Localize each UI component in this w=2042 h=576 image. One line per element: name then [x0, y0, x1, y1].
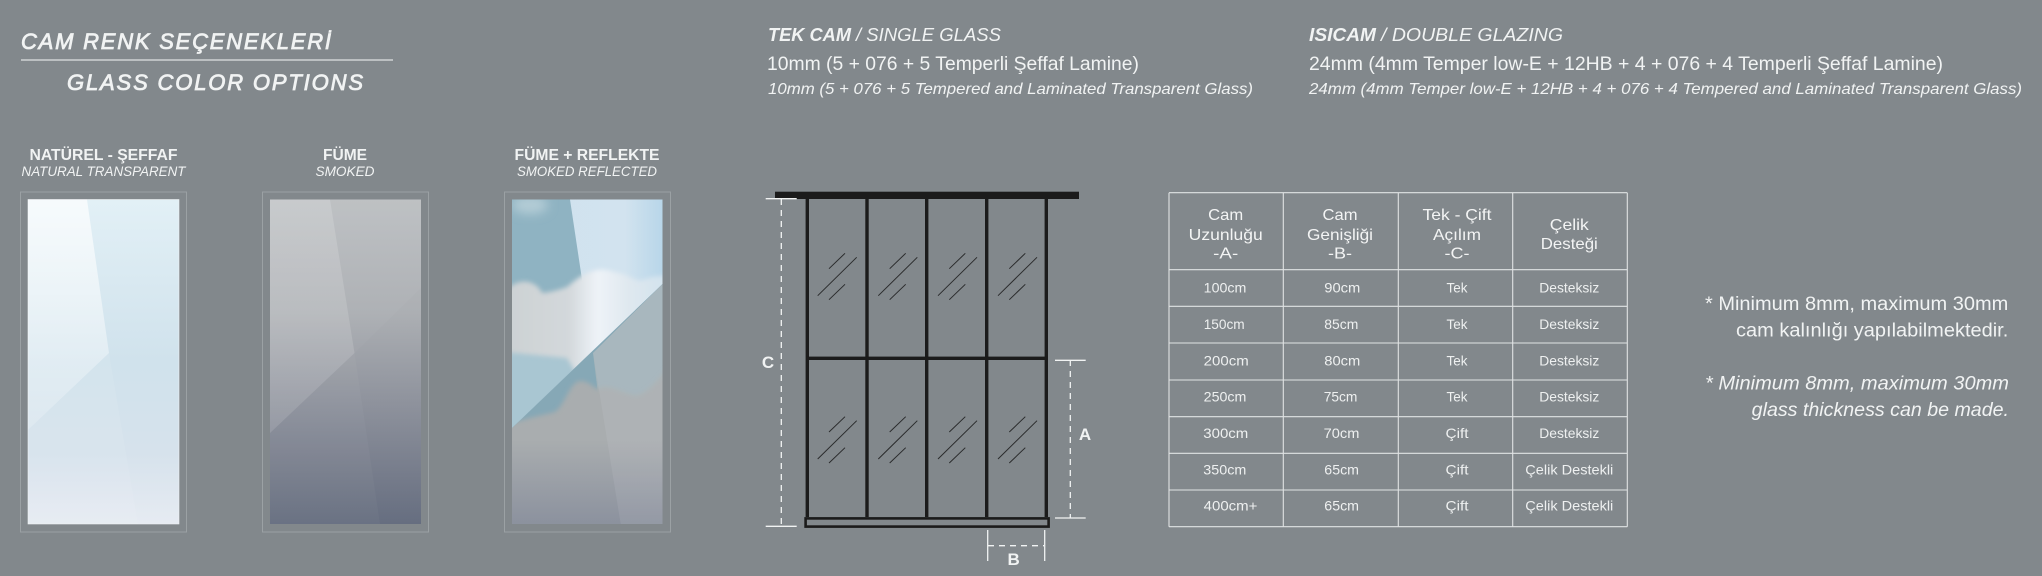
note English: * Minimum 8mm, maximum 30mm	[1705, 373, 2009, 394]
dimension A: A	[1079, 425, 1091, 444]
table header: Cam	[1208, 207, 1243, 224]
title Turkish: CAM RENK SEÇENEKLERİ	[21, 29, 332, 54]
spec English: 24mm (4mm Temper low-E + 12HB + 4 + 076 + 4 Tempered and Laminated Transparent Glass)	[1308, 81, 2022, 98]
table grid	[1169, 193, 1627, 527]
table rows: 90cm	[1324, 280, 1360, 296]
table rows: 75cm	[1324, 389, 1357, 405]
table header: Uzunluğu	[1189, 227, 1263, 244]
table rows: Tek	[1446, 389, 1468, 405]
note: thickness	[1705, 294, 2009, 421]
table header: Tek - Çift	[1422, 207, 1492, 224]
title English: GLASS COLOR OPTIONS	[67, 70, 363, 95]
table rows: 350cm	[1203, 461, 1246, 477]
frame	[504, 192, 670, 532]
table rows: 250cm	[1204, 389, 1246, 405]
heading: double glazing: ISICAM	[1309, 25, 1377, 45]
table rows: Desteksiz	[1539, 389, 1599, 405]
heading: double glazing	[1309, 25, 1563, 45]
frame profiles	[806, 199, 1048, 517]
table rows: Tek	[1446, 316, 1468, 332]
panel: smoked reflected glass	[504, 147, 670, 535]
table rows: 70cm	[1324, 425, 1359, 441]
table rows: 200cm	[1204, 352, 1249, 368]
spec Turkish: 24mm (4mm Temper low-E + 12HB + 4 + 076 + 4 Temperli Şeffaf Lamine)	[1309, 54, 1943, 75]
heading: single glass: TEK CAM	[768, 25, 852, 45]
heading: single glass	[768, 25, 1001, 45]
note English: glass thickness can be made.	[1752, 400, 2009, 421]
text block: single glass	[767, 25, 1253, 98]
table rows: Çift	[1446, 461, 1469, 477]
label: smoked	[316, 147, 374, 179]
label: smoked reflected: SMOKED REFLECTED	[517, 163, 657, 179]
dimension B	[988, 530, 1045, 569]
table header: -C-	[1444, 246, 1470, 262]
technical drawing: partition with dimensions	[762, 192, 1091, 569]
note Turkish: * Minimum 8mm, maximum 30mm	[1705, 294, 2008, 315]
dimension B: B	[1008, 550, 1020, 569]
table rows	[1203, 280, 1613, 514]
note Turkish	[1705, 294, 2008, 342]
table rows: Tek	[1446, 280, 1468, 296]
glass sample: clear	[28, 200, 179, 524]
table header: Çelik	[1550, 217, 1590, 234]
text block: double glazing	[1308, 25, 2022, 98]
note Turkish: cam kalınlığı yapılabilmektedir.	[1736, 321, 2008, 342]
table rows: 400cm+	[1204, 498, 1257, 514]
table rows: Çelik Destekli	[1525, 498, 1613, 514]
table header: Genişliği	[1307, 227, 1373, 244]
frame	[20, 192, 186, 532]
top rail	[775, 192, 1079, 199]
table header: Desteği	[1541, 236, 1598, 253]
bottom rail	[806, 518, 1049, 527]
table header: Cam	[1322, 207, 1358, 224]
label: smoked reflected: FÜME + REFLEKTE	[514, 147, 660, 164]
label: natural transparent: NATÜREL - ŞEFFAF	[30, 147, 178, 164]
label: smoked reflected	[514, 147, 660, 179]
table rows: Desteksiz	[1539, 352, 1599, 368]
spec Turkish: 10mm (5 + 076 + 5 Temperli Şeffaf Lamine)	[767, 54, 1139, 75]
glass sample: reflected sky	[512, 200, 662, 524]
table rows: 65cm	[1324, 461, 1359, 477]
table rows: 150cm	[1204, 316, 1245, 332]
table rows: Desteksiz	[1539, 316, 1599, 332]
frame	[262, 192, 428, 532]
table rows: 85cm	[1324, 316, 1358, 332]
table: glass dimensions	[1169, 193, 1627, 527]
spec English: 10mm (5 + 076 + 5 Tempered and Laminated Transparent Glass)	[768, 81, 1253, 98]
label: natural transparent: NATURAL TRANSPARENT	[22, 163, 187, 179]
title: glass color options	[21, 29, 393, 95]
table rows: 80cm	[1324, 352, 1360, 368]
note English	[1705, 373, 2009, 421]
table header	[1189, 207, 1598, 262]
table rows: Tek	[1446, 352, 1468, 368]
table rows: 300cm	[1203, 425, 1248, 441]
heading: double glazing: / DOUBLE GLAZING	[1379, 25, 1563, 45]
panel: natural transparent glass	[20, 147, 187, 532]
table rows: 100cm	[1204, 280, 1246, 296]
table rows: Çift	[1446, 425, 1469, 441]
table header: -A-	[1213, 246, 1238, 262]
table rows: Çift	[1446, 498, 1469, 514]
table rows: 65cm	[1324, 498, 1359, 514]
table rows: Çelik Destekli	[1525, 461, 1613, 477]
label: natural transparent	[22, 147, 187, 179]
glass sample: smoked	[270, 200, 421, 524]
icon: glass hatches	[818, 253, 1037, 463]
table rows: Desteksiz	[1539, 425, 1599, 441]
table rows: Desteksiz	[1539, 280, 1599, 296]
dimension C: C	[762, 353, 774, 372]
panel: smoked glass	[262, 147, 428, 532]
heading: single glass: / SINGLE GLASS	[854, 25, 1001, 45]
table header: -B-	[1328, 246, 1352, 262]
label: smoked: SMOKED	[316, 163, 374, 179]
label: smoked: FÜME	[323, 147, 367, 164]
table header: Açılım	[1433, 227, 1481, 244]
